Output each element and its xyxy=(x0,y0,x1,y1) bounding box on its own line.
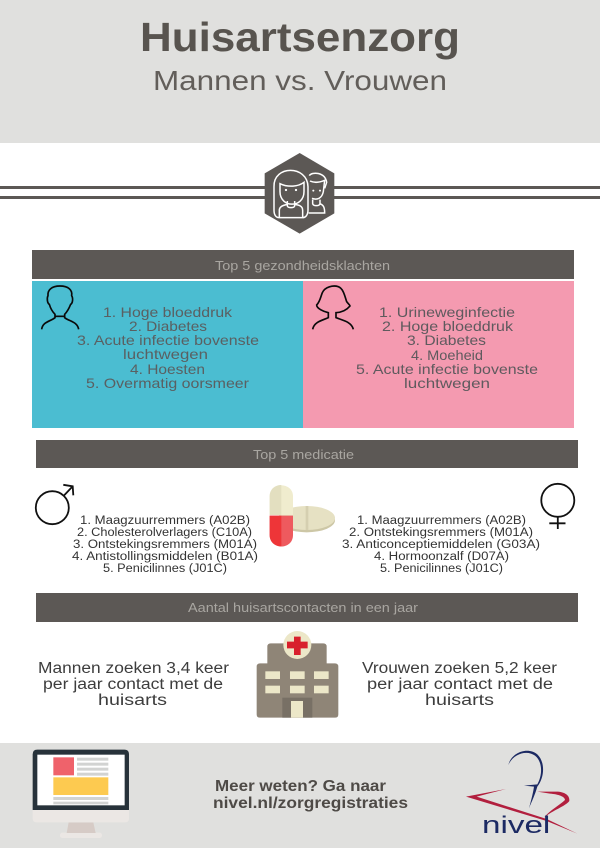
list: men complaints: 4. Hoesten xyxy=(130,361,205,377)
logo: nivel: nivel xyxy=(482,812,550,839)
text: men contacts: Mannen zoeken 3,4 keer xyxy=(38,660,229,677)
list: men medication xyxy=(72,515,258,575)
heading bar: top 5 complaints: Top 5 gezondheidsklachten xyxy=(215,258,390,273)
icon: computer monitor xyxy=(33,750,129,838)
list: women complaints xyxy=(356,304,538,391)
text: men contacts xyxy=(38,660,229,709)
panel: men complaints xyxy=(32,281,303,428)
heading bar: top 5 medication: Top 5 medicatie xyxy=(253,447,354,462)
icon: hospital xyxy=(257,631,338,718)
heading bar: top 5 complaints xyxy=(32,250,574,279)
heading bar: contacts per year: Aantal huisartscontacten in een jaar xyxy=(188,600,419,615)
call to action: Meer weten? Ga naar xyxy=(215,778,386,795)
list: women medication: 3. Anticonceptiemiddelen (G03A) xyxy=(342,539,540,551)
list: women complaints: 5. Acute infectie bovenste xyxy=(356,361,538,377)
list: men medication: 3. Ontstekingsremmers (M01A) xyxy=(73,539,257,551)
list: women complaints: 3. Diabetes xyxy=(407,332,486,348)
icon: pills xyxy=(270,485,335,546)
text: women contacts xyxy=(362,660,557,709)
title: Huisartsenzorg xyxy=(140,14,460,60)
list: men medication: 2. Cholesterolverlagers (C10A) xyxy=(77,527,252,539)
text: women contacts: per jaar contact met de xyxy=(367,676,553,693)
icon: hexagon with people xyxy=(265,153,334,234)
call to action xyxy=(213,778,408,812)
icon: woman outline xyxy=(313,286,353,329)
logo: nivel xyxy=(466,751,577,839)
text: women contacts: huisarts xyxy=(425,692,494,709)
subtitle: Mannen vs. Vrouwen xyxy=(153,65,447,96)
divider lines xyxy=(0,186,600,199)
list: women medication: 5. Penicilinnes (J01C) xyxy=(380,563,503,575)
list: women complaints: 4. Moeheid xyxy=(411,347,483,363)
icon: female symbol xyxy=(541,484,574,529)
list: men medication: 1. Maagzuurremmers (A02B) xyxy=(80,515,250,527)
list: men complaints xyxy=(77,304,259,391)
list: men complaints: 2. Diabetes xyxy=(129,318,207,334)
icon: man outline xyxy=(42,286,79,329)
icon: male symbol xyxy=(36,485,73,524)
list: men complaints: luchtwegen xyxy=(123,346,208,362)
list: women complaints: 1. Urineweginfectie xyxy=(379,304,515,320)
list: women medication: 4. Hormoonzalf (D07A) xyxy=(374,551,509,563)
list: women complaints: luchtwegen xyxy=(404,375,490,391)
heading bar: contacts per year xyxy=(36,593,578,622)
text: men contacts: per jaar contact met de xyxy=(43,676,223,693)
list: men complaints: 1. Hoge bloeddruk xyxy=(103,304,233,320)
heading bar: top 5 medication xyxy=(36,440,578,468)
list: men medication: 4. Antistollingsmiddelen (B01A) xyxy=(72,551,258,563)
call to action: nivel.nl/zorgregistraties xyxy=(213,795,408,812)
list: women medication: 2. Ontstekingsremmers (M01A) xyxy=(349,527,533,539)
list: men complaints: 3. Acute infectie bovenste xyxy=(77,332,259,348)
list: women medication: 1. Maagzuurremmers (A02B) xyxy=(357,515,526,527)
header band xyxy=(0,0,600,143)
text: women contacts: Vrouwen zoeken 5,2 keer xyxy=(362,660,557,677)
panel: women complaints xyxy=(303,281,574,428)
list: women medication xyxy=(342,515,540,575)
text: men contacts: huisarts xyxy=(98,692,167,709)
list: men medication: 5. Penicilinnes (J01C) xyxy=(103,563,227,575)
list: women complaints: 2. Hoge bloeddruk xyxy=(382,318,514,334)
list: men complaints: 5. Overmatig oorsmeer xyxy=(86,375,249,391)
footer band xyxy=(0,743,600,848)
